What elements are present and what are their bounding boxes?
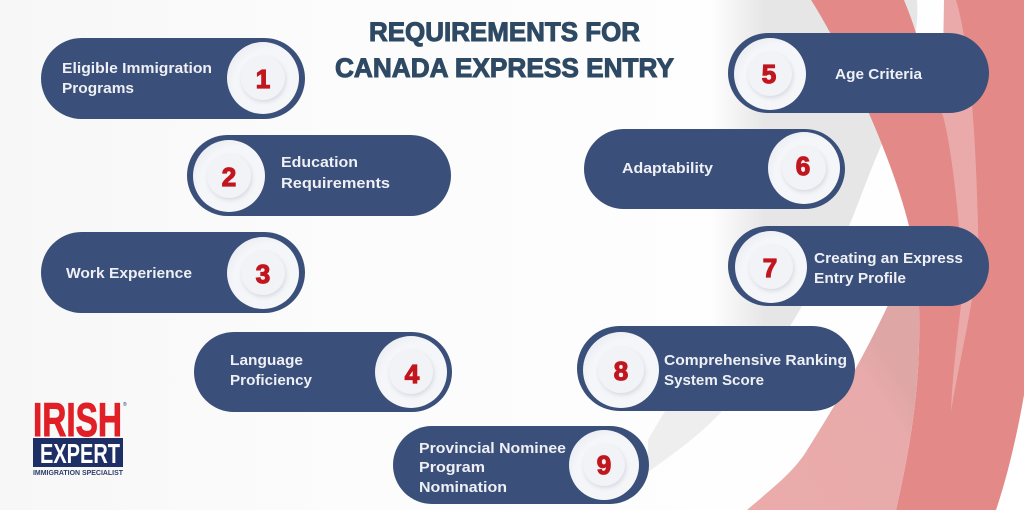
panel: 3 Work Experience: 3 <box>256 259 270 289</box>
panel: 7 Creating an Express Entry Profile: 7 <box>763 253 777 283</box>
panel: 9 Provincial Nominee Program Nomination: 9 <box>597 450 611 480</box>
panel: 8 Comprehensive Ranking System Score: System Score <box>664 372 764 389</box>
panel: 5 Age Criteria: Age Criteria <box>835 66 923 83</box>
panel: 7 Creating an Express Entry Profile: Creating an Express <box>814 250 963 267</box>
panel: 7 Creating an Express Entry Profile <box>728 226 989 306</box>
title: CANADA EXPRESS ENTRY <box>335 53 674 83</box>
logo: Irish Expert: IRISH <box>33 393 122 446</box>
panel: 6 Adaptability: 6 <box>796 151 810 181</box>
panel: 8 Comprehensive Ranking System Score <box>577 326 855 411</box>
panel: 1 Eligible Immigration Programs: 1 <box>256 64 270 94</box>
panel: 4 Language Proficiency: Proficiency <box>230 372 313 389</box>
panel: 5 Age Criteria: 5 <box>762 59 776 89</box>
panel: 4 Language Proficiency: Language <box>230 352 303 369</box>
panel: 6 Adaptability <box>584 129 845 209</box>
title <box>335 17 674 83</box>
panel: 2 Education Requirements: Requirements <box>281 175 390 192</box>
title: REQUIREMENTS FOR <box>369 17 640 47</box>
panel: 3 Work Experience: Work Experience <box>66 265 192 282</box>
panel: 7 Creating an Express Entry Profile: Entry Profile <box>814 270 906 287</box>
panel: 1 Eligible Immigration Programs <box>41 38 305 119</box>
panel: 2 Education Requirements <box>187 135 451 216</box>
logo: Irish Expert <box>33 393 127 477</box>
panel: 1 Eligible Immigration Programs: Eligible Immigration <box>62 60 212 77</box>
panel: 2 Education Requirements: 2 <box>222 162 236 192</box>
logo: Irish Expert: EXPERT <box>40 438 120 469</box>
panel: 5 Age Criteria <box>728 33 989 113</box>
panel: 3 Work Experience <box>41 232 305 313</box>
panel: 1 Eligible Immigration Programs: Programs <box>62 80 134 97</box>
panel: 6 Adaptability: Adaptability <box>622 160 714 177</box>
logo: Irish Expert: ® <box>123 401 127 408</box>
panel: 4 Language Proficiency: 4 <box>405 359 420 389</box>
panel: 9 Provincial Nominee Program Nomination: Program <box>419 459 485 476</box>
logo: Irish Expert: IMMIGRATION SPECIALIST <box>33 468 123 477</box>
panel: 8 Comprehensive Ranking System Score: Comprehensive Ranking <box>664 352 847 369</box>
panel: 9 Provincial Nominee Program Nomination: Nomination <box>419 479 507 496</box>
panel: 9 Provincial Nominee Program Nomination <box>393 426 649 504</box>
panel: 8 Comprehensive Ranking System Score: 8 <box>614 356 628 386</box>
panel: 4 Language Proficiency <box>194 332 452 412</box>
panel: 2 Education Requirements: Education <box>281 154 358 171</box>
panel: 9 Provincial Nominee Program Nomination: Provincial Nominee <box>419 440 566 457</box>
